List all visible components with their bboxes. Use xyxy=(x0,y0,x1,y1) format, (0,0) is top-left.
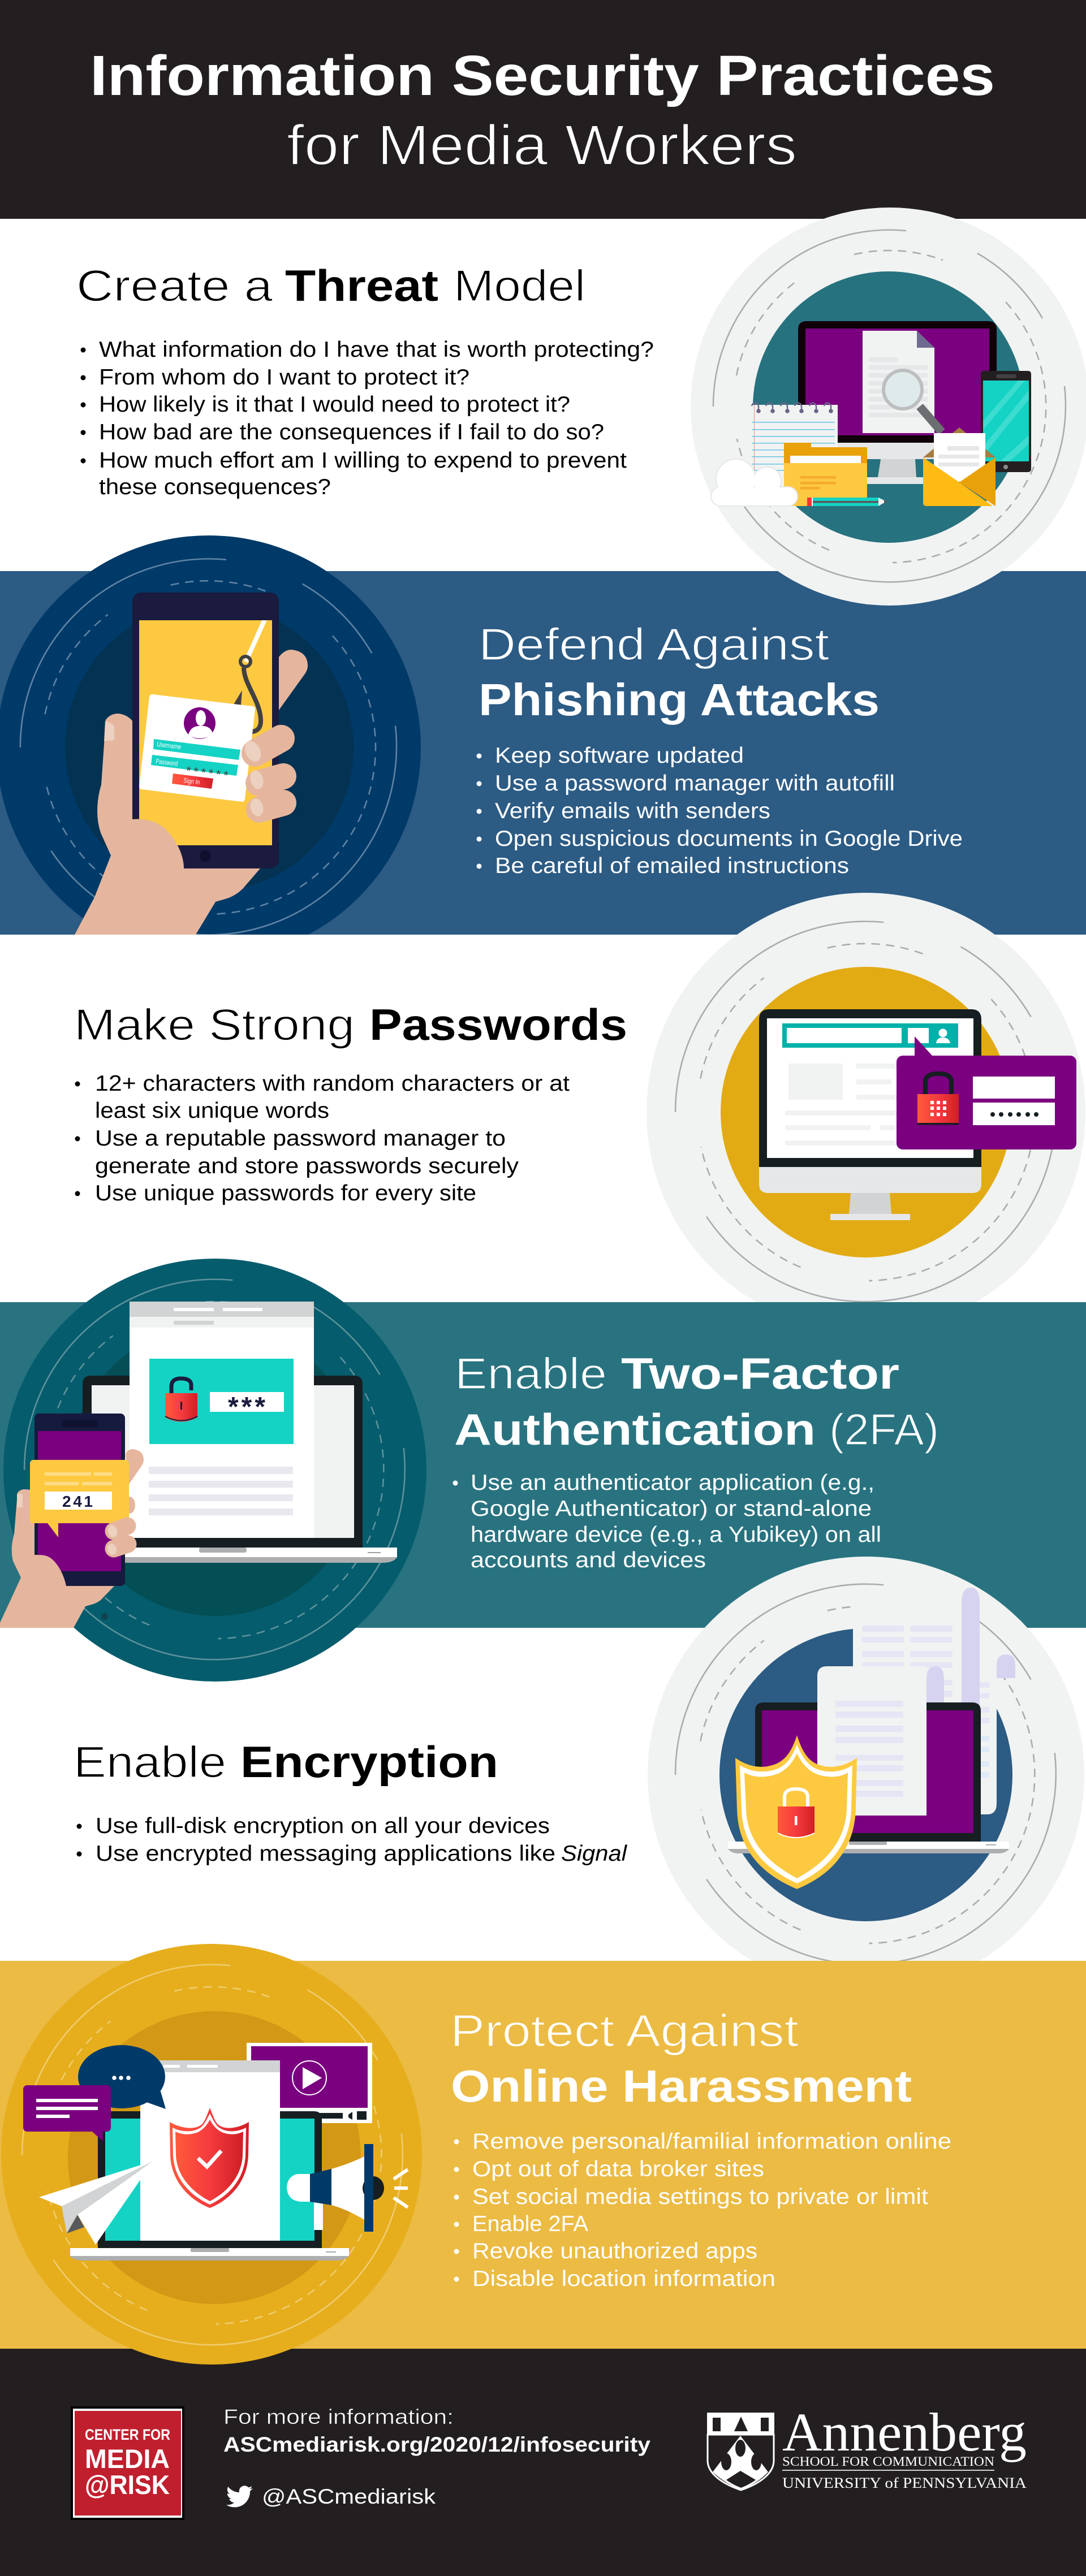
panel: harassment text xyxy=(450,2006,951,2291)
illustration: threat model circle xyxy=(691,208,1086,606)
bullet list: harassment: Remove personal/familial information online xyxy=(472,2129,951,2154)
icon: browser window xyxy=(130,1302,314,1538)
logo: Center for Media at Risk: @RISK xyxy=(85,2470,170,2500)
heading: harassment: Online Harassment xyxy=(451,2061,912,2111)
heading: harassment xyxy=(450,2006,912,2111)
bullet list: passwords: least six unique words xyxy=(95,1099,329,1123)
callout: password popup xyxy=(897,1036,1076,1149)
title: Information Security Practices xyxy=(90,44,995,107)
footer text: more information xyxy=(223,2405,650,2456)
illustration: phishing circle xyxy=(0,535,421,959)
icon: open padlock xyxy=(165,1378,197,1421)
logo: Center for Media at Risk xyxy=(71,2406,184,2520)
inner disc xyxy=(719,1628,1012,1921)
panel: encryption text xyxy=(74,1737,627,1866)
inner disc xyxy=(68,2011,361,2304)
bullet list: encryption: Use encrypted messaging applications like xyxy=(96,1842,555,1866)
icon: phone xyxy=(35,1414,125,1586)
bullet list: passwords: Use a reputable password manager to xyxy=(95,1126,506,1151)
bullet list: threat model: How likely is it that I would need to protect it? xyxy=(99,392,570,417)
outer disc xyxy=(647,893,1085,1332)
callout: code message xyxy=(30,1460,129,1537)
heading: phishing: Phishing Attacks xyxy=(479,675,880,725)
logo: Annenberg wordmark xyxy=(782,2402,1027,2491)
heading: phishing xyxy=(479,619,880,725)
icon: login card: Password xyxy=(156,757,178,768)
icon: folder xyxy=(784,443,867,506)
heading: harassment: Protect Against xyxy=(450,2006,799,2056)
heading: encryption xyxy=(74,1737,498,1787)
bullet list: threat model: From whom do I want to protect it? xyxy=(99,365,469,390)
bullet list: harassment: Set social media settings to private or limit xyxy=(472,2185,928,2209)
heading: encryption: Encryption xyxy=(240,1737,498,1787)
heading: passwords xyxy=(74,1000,627,1049)
bullet list: phishing: Keep software updated xyxy=(495,744,744,768)
icon: browser window: *** xyxy=(228,1392,265,1422)
heading: encryption: Enable xyxy=(74,1737,226,1787)
bullet list: harassment: Disable location information xyxy=(472,2267,775,2291)
outer disc xyxy=(691,208,1086,606)
panel: two-factor text xyxy=(453,1348,939,1572)
icon: hand back fingers xyxy=(124,1449,144,1514)
inner disc xyxy=(753,271,1024,543)
icon: speech bubble dark xyxy=(78,2045,166,2109)
title: for Media Workers xyxy=(287,114,797,177)
bullet list: harassment: Enable 2FA xyxy=(472,2212,588,2236)
icon: shield with lock xyxy=(735,1735,857,1889)
icon: hand back finger xyxy=(279,650,308,710)
illustration: encryption circle xyxy=(648,1557,1084,1993)
logo: Annenberg wordmark: Annenberg xyxy=(782,2402,1027,2462)
icon: fishing hook xyxy=(227,656,261,732)
heading: threat model: Model xyxy=(454,261,585,310)
icon: laptop xyxy=(728,1702,1009,1853)
bullet list: phishing xyxy=(476,744,963,878)
icon: document xyxy=(863,331,934,433)
icon: notepad xyxy=(752,403,838,505)
panel: passwords text xyxy=(74,1000,627,1205)
bullet list: two-factor: accounts and devices xyxy=(471,1548,706,1572)
icon: paper plane xyxy=(39,2161,153,2245)
icon: back documents xyxy=(853,1587,1015,1814)
icon: red shield xyxy=(170,2108,249,2208)
icon: padlock xyxy=(917,1074,959,1125)
inner disc xyxy=(721,967,1011,1257)
bullet list: threat model: How much effort am I willing to expend to prevent xyxy=(99,448,627,473)
band: footer xyxy=(0,2349,1086,2576)
icon: smartphone xyxy=(981,371,1031,472)
icon: laptop xyxy=(70,2111,349,2261)
icon: envelope xyxy=(923,427,996,506)
bullet list: threat model: What information do I have that is worth protecting? xyxy=(99,338,654,362)
title xyxy=(90,44,995,177)
bullet list: threat model: these consequences? xyxy=(99,475,331,499)
icon: twitter bird xyxy=(226,2486,253,2507)
bullet list: encryption xyxy=(77,1814,627,1866)
outer disc xyxy=(0,535,421,959)
band: harassment xyxy=(0,1961,1086,2349)
heading: two-factor xyxy=(454,1348,939,1454)
heading: two-factor: Two-Factor xyxy=(621,1348,899,1398)
icon: login card xyxy=(142,697,252,799)
icon: magnifying glass xyxy=(884,370,942,432)
heading: threat model: Threat xyxy=(285,261,438,310)
icon: hand and fingers xyxy=(75,714,283,935)
illustration: two-factor circle xyxy=(0,1259,426,1682)
bullet list: passwords xyxy=(75,1071,570,1205)
heading: threat model xyxy=(76,261,585,310)
bullet list: phishing: Be careful of emailed instructions xyxy=(495,854,849,878)
logo: Center for Media at Risk: CENTER FOR xyxy=(85,2426,170,2443)
icon: desktop monitor xyxy=(759,1009,981,1220)
illustration: harassment circle xyxy=(1,1944,422,2365)
bullet list: encryption: Use full-disk encryption on all your devices xyxy=(96,1814,550,1838)
icon: hand xyxy=(0,1489,114,1628)
icon: speech bubble purple xyxy=(23,2085,111,2141)
logo: Annenberg shield xyxy=(707,2413,774,2490)
heading: two-factor: Enable xyxy=(455,1348,607,1398)
bullet list: threat model: How bad are the consequences if I fail to do so? xyxy=(99,420,604,444)
band: two-factor xyxy=(0,1302,1086,1628)
icon: desktop monitor xyxy=(798,321,997,484)
icon: login card: Username xyxy=(157,740,182,751)
band: phishing xyxy=(0,571,1086,935)
panel: threat model text xyxy=(76,261,654,499)
inner disc xyxy=(69,1324,361,1616)
bullet list: encryption: Signal xyxy=(561,1842,627,1866)
bullet list: two-factor xyxy=(453,1471,881,1572)
bullet list: phishing: Verify emails with senders xyxy=(495,799,770,823)
avatar xyxy=(184,707,216,739)
bullet list: passwords: generate and store passwords securely xyxy=(95,1154,519,1178)
outer disc xyxy=(1,1944,422,2365)
bullet list: harassment xyxy=(454,2129,951,2291)
heading: two-factor: Authentication xyxy=(454,1404,816,1454)
icon: cloud xyxy=(711,459,798,506)
logo: Annenberg wordmark: UNIVERSITY of PENNSYLVANIA xyxy=(782,2475,1027,2491)
heading: passwords: Passwords xyxy=(369,1000,627,1049)
bullet list: phishing: Open suspicious documents in Google Drive xyxy=(495,827,963,851)
bullet list: passwords: 12+ characters with random characters or at xyxy=(95,1071,570,1096)
icon: laptop xyxy=(83,1376,397,1563)
icon: video player xyxy=(247,2043,372,2123)
icon: fishing line xyxy=(244,620,267,663)
icon: megaphone xyxy=(287,2144,408,2232)
bullet list: harassment: Opt out of data broker sites xyxy=(472,2157,764,2181)
icon: phone xyxy=(132,593,279,868)
icon: browser window xyxy=(140,2060,280,2241)
footer text: twitter handle: @ASCmediarisk xyxy=(262,2485,436,2508)
icon: pencil xyxy=(807,498,889,506)
heading: two-factor: (2FA) xyxy=(829,1404,939,1454)
bullet list: two-factor: hardware device (e.g., a Yubikey) on all xyxy=(471,1523,881,1547)
icon: front document xyxy=(817,1666,944,1816)
bullet list: two-factor: Google Authenticator) or stand-alone xyxy=(471,1497,872,1521)
bullet list: threat model xyxy=(80,338,654,499)
outer disc xyxy=(648,1557,1084,1993)
footer text: more information: For more information: xyxy=(223,2405,454,2428)
inner disc xyxy=(65,603,354,892)
header band xyxy=(0,0,1086,219)
heading: phishing: Defend Against xyxy=(479,619,829,669)
icon: fingers xyxy=(106,1524,128,1556)
logo: Center for Media at Risk: MEDIA xyxy=(85,2444,170,2474)
callout: code message: 241 xyxy=(62,1493,93,1510)
bullet list: harassment: Revoke unauthorized apps xyxy=(472,2239,757,2263)
outer disc xyxy=(3,1259,426,1682)
heading: passwords: Make Strong xyxy=(74,1000,355,1049)
bullet list: passwords: Use unique passwords for every site xyxy=(95,1181,476,1205)
bullet list: two-factor: Use an authenticator application (e.g., xyxy=(471,1471,874,1495)
bullet list: phishing: Use a password manager with autofill xyxy=(495,771,895,796)
icon: login card: Sign In xyxy=(183,776,200,786)
footer text: more information: ASCmediarisk.org/2020/12/infosecurity xyxy=(223,2433,650,2456)
heading: threat model: Create a xyxy=(76,261,273,310)
illustration: passwords circle xyxy=(647,893,1085,1332)
panel: phishing text xyxy=(476,619,963,878)
icon: login card: ****** xyxy=(185,763,229,783)
logo: Annenberg wordmark: SCHOOL FOR COMMUNICATION xyxy=(782,2454,994,2469)
